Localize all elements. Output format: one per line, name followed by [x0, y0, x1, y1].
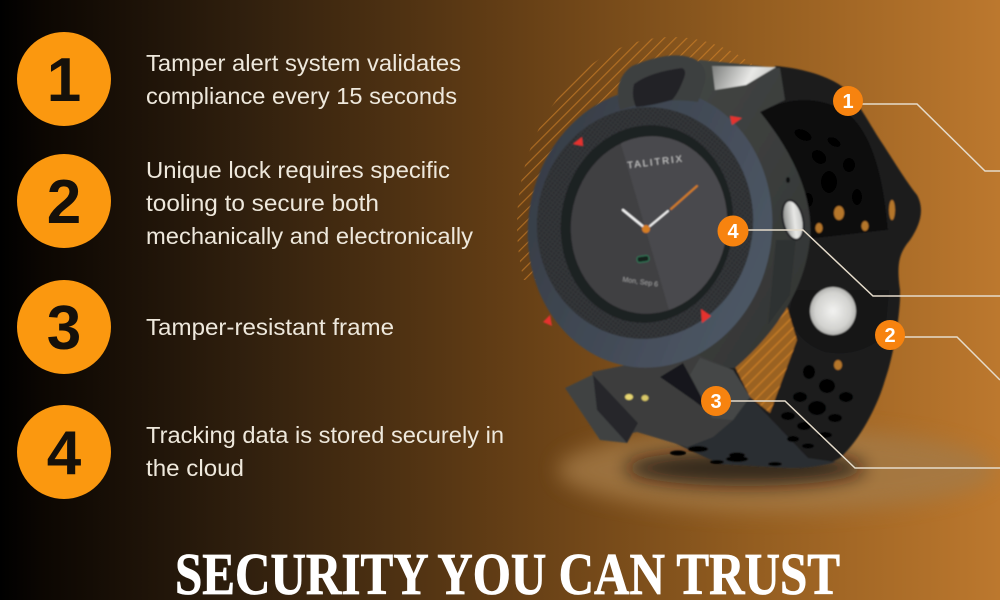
- dark inner ring: [548, 114, 746, 334]
- striped backdrop behind the watch: [517, 37, 752, 280]
- item 3: tamper-resistant frame: Tamper-resistant frame: [146, 314, 394, 340]
- callout badge 1: [833, 86, 863, 116]
- item 4: cloud tracking data: [17, 405, 504, 499]
- lock disc: [810, 287, 856, 335]
- floor shadow: [625, 450, 865, 486]
- charging loop: [618, 55, 705, 110]
- item 4: cloud tracking data: 4: [47, 419, 82, 488]
- strap gap showing background: [733, 300, 797, 413]
- item 3: tamper-resistant frame: [17, 280, 394, 374]
- lock pad: [790, 290, 889, 353]
- item 2: unique lock: 2: [47, 168, 81, 237]
- item 1: tamper alert: [17, 32, 461, 126]
- decorative floor glow under the watch: [558, 428, 994, 512]
- battery icon: [637, 255, 649, 263]
- callout badge 3: [701, 386, 731, 416]
- clasp base: [565, 352, 750, 447]
- callout badge 4: 4: [727, 221, 739, 243]
- callout badge 3: 3: [710, 391, 722, 413]
- watch body: [620, 60, 810, 370]
- callout badge 4: [718, 216, 748, 246]
- callout badge 1: 1: [842, 91, 854, 113]
- item 1: tamper alert: 1: [47, 46, 81, 115]
- clock hands: [623, 186, 697, 233]
- watch illustration: [510, 55, 921, 486]
- item 1: tamper alert: Tamper alert system validates: [146, 50, 461, 76]
- item 2: unique lock: [17, 154, 473, 249]
- front strap band: [660, 397, 836, 468]
- orange see-through holes: [816, 200, 895, 370]
- strap: [653, 66, 921, 468]
- callout badge 2: 2: [884, 325, 896, 347]
- brand name: TALITRIX: [627, 154, 685, 171]
- callout leader lines: [728, 104, 1000, 468]
- bezel: [510, 72, 790, 384]
- item 2: unique lock: mechanically and electronically: [146, 223, 473, 249]
- textured ring: [522, 93, 768, 353]
- item 3: tamper-resistant frame: 3: [47, 294, 81, 363]
- silver lug highlight: [712, 66, 776, 90]
- item 4: cloud tracking data: the cloud: [146, 455, 244, 481]
- item 4: cloud tracking data: Tracking data is stored securely in: [146, 422, 504, 448]
- red alignment triangles: [543, 116, 742, 326]
- list of security features: [17, 32, 504, 499]
- callout badge 2: [875, 320, 905, 350]
- strap holes: [670, 127, 862, 466]
- item 2: unique lock: Unique lock requires specific: [146, 157, 450, 183]
- watch face: [570, 136, 728, 314]
- side button: [779, 198, 807, 242]
- date: Mon, Sep 6: [622, 277, 659, 288]
- item 2: unique lock: tooling to secure both: [146, 190, 379, 216]
- item 1: tamper alert: compliance every 15 seconds: [146, 83, 457, 109]
